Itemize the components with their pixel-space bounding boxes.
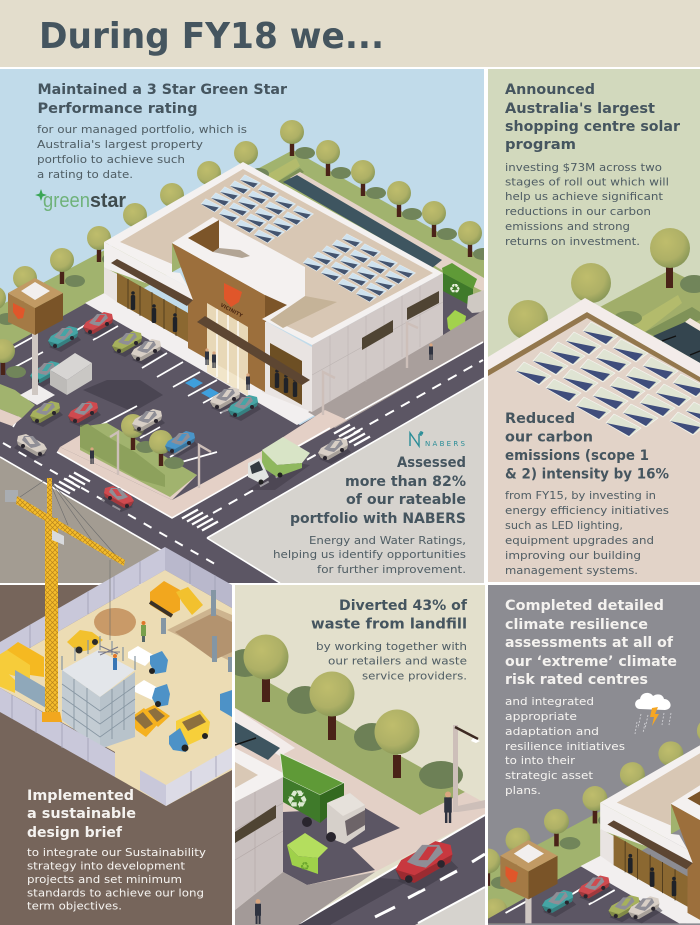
text: carbon emissions body: improving our building [505,549,641,562]
billboard pole [525,897,532,923]
heading: nabers: of our rateable [346,491,466,508]
yellow dump truck [169,710,210,752]
rear walkway and dark strip [653,318,700,363]
hill [482,707,700,923]
heading: climate resilience: climate resilience [505,616,648,633]
pavement [235,708,485,885]
service yard shadow [283,808,400,885]
store forecourt pavement [85,293,314,425]
storm cloud icon [635,693,671,734]
red car [396,841,458,890]
text: design brief body: projects and set minimum [27,873,182,886]
heading: design brief: a sustainable [27,805,136,822]
site cabins [0,642,53,712]
hedge band [489,866,602,923]
solar panels [516,322,700,437]
building: corner shop wall [262,319,312,412]
building: right wall [312,273,443,412]
building corner [235,748,283,910]
panel: climate resilience [475,585,700,925]
heading: nabers: portfolio with NABERS [290,510,466,527]
building: brown central block: VICINITY [219,302,244,319]
site floor [0,570,232,806]
text: waste diverted body: by working together with [316,640,467,653]
heading: nabers [290,454,466,527]
rear pavement and dark service strip [283,172,484,292]
verge trees [244,634,420,778]
trees [508,228,700,340]
isometric shopping centre scene [0,120,493,583]
panel: green star and nabers scene [0,69,493,583]
heading: design brief [27,787,136,841]
parking bay lines [506,882,615,913]
panel: waste diverted [227,585,485,925]
rubble pile [94,608,136,636]
text: solar program body: returns on investment. [505,235,640,248]
roof parapet [600,719,700,910]
text: climate resilience body: strategic asset [505,769,594,782]
text: green star body: Australia's largest property [37,138,204,151]
roof block top [671,777,700,892]
heading: carbon emissions: our carbon [505,428,593,446]
text: nabers body: for further improvement. [317,563,466,576]
text: waste diverted body [316,640,467,682]
building: roof surface [120,169,433,338]
planted island [57,410,347,518]
greenstar logo: green [43,190,90,212]
heading: climate resilience: Completed detailed [505,597,664,614]
text: climate resilience body: and integrated [505,695,594,708]
green recycling truck: ♻ [286,785,308,814]
heading: design brief: Implemented [27,787,134,804]
corner ground: grey triangle [207,378,484,583]
businessman [444,791,452,823]
text: carbon emissions body: from FY15, by investing in [505,489,656,502]
back fences [0,547,232,665]
woman [255,899,261,924]
construction ground [0,458,188,583]
greenstar logo: star [90,190,126,212]
accessible parking bays [185,378,219,398]
parked cars [542,875,663,923]
text: solar program body: stages of roll out which will [505,176,669,188]
building: brown block top and light well [172,217,337,328]
text: climate resilience body: appropriate [505,710,577,723]
excavator [150,581,203,616]
orange skips [130,705,170,737]
heading: green star [38,81,288,117]
bicycle shelter [50,353,92,395]
text: solar program body: emissions and strong [505,220,630,233]
text: design brief body: strategy into development [27,860,186,872]
heading: green star: Maintained a 3 Star Green Star [38,81,288,98]
road [298,815,485,925]
parked and moving cars [14,312,351,512]
building: roof parapet [104,162,443,345]
panel: solar and carbon [488,69,700,582]
heading: green star: Performance rating [38,100,198,117]
billboard sign [8,278,63,405]
forecourt [580,847,700,923]
text: design brief body: standards to achieve our long [27,886,204,900]
heading: solar program: program [505,136,576,153]
rooftop solar panels: array one [201,175,314,243]
text: solar program body [505,161,669,248]
text: nabers body [273,534,466,576]
text: solar program body: help us achieve significant [505,190,664,203]
heading: carbon emissions: Reduced [505,410,575,427]
heading: solar program: Announced [505,81,595,98]
text: carbon emissions body: equipment upgrades and [505,534,654,547]
text: waste diverted body: service providers. [362,670,467,682]
dark strip and walkway behind building [235,708,295,760]
heading: waste diverted [311,597,468,632]
blue and white trucks [128,646,232,717]
text: climate resilience body: to into their [505,754,576,767]
text: green star body: portfolio to achieve such [37,153,185,166]
text: climate resilience body [505,695,625,797]
heading: climate resilience: risk rated centres [505,671,648,688]
heading: carbon emissions [505,410,669,482]
text: green star body: a rating to date. [37,168,133,181]
brown central block [671,804,700,923]
text: nabers body: Energy and Water Ratings, [309,534,466,547]
text: nabers body: helping us identify opportunities [273,548,466,561]
verge tree shadows [227,649,463,789]
heading: waste diverted: waste from landfill [311,616,467,632]
heading: waste diverted: Diverted 43% of [339,597,468,614]
greenstar logo [35,189,126,212]
green verge [235,664,465,815]
side pavement [235,872,375,925]
text: green star body: for our managed portfolio, which is [37,123,247,136]
parking bay lines [13,318,233,463]
heading: solar program: shopping centre solar [505,118,681,135]
rooftop solar panels: array two [303,234,416,302]
text: solar program body: reductions in our carbon [505,205,651,218]
left edge green and pavement [0,339,35,426]
heading: nabers: Assessed [397,454,466,471]
heading: climate resilience: assessments at all of [505,634,674,651]
title: During FY18 we... [39,16,384,57]
heading: nabers: more than 82% [345,473,466,490]
shopping centre scene crop [475,698,700,923]
text: carbon emissions body: management systems. [505,564,638,577]
heading: solar program [505,81,681,153]
heading: design brief: design brief [27,824,123,841]
heading: climate resilience: our ‘extreme’ climate [505,653,677,670]
nabers logo: NABERS [425,440,466,448]
tower crane [5,478,125,722]
text: solar program body: investing $73M across two [505,161,662,174]
construction site illustration [0,478,232,806]
text: carbon emissions body: energy efficiency initiatives [505,504,669,517]
text: design brief body: to integrate our Sustainability [27,846,207,859]
roof surface [617,727,700,903]
text: green star body [37,123,247,181]
green recycling truck [280,753,365,844]
text: design brief body: term objectives. [27,900,122,912]
heading: climate resilience [505,597,677,688]
asphalt car park and roads [0,302,484,583]
text: waste diverted body: our retailers and waste [328,654,467,668]
green wheelie bin: ♻ [300,860,310,873]
nabers logo [410,431,466,448]
text: climate resilience body: resilience initiatives [505,740,625,753]
car park asphalt [482,865,686,923]
heading: carbon emissions: & 2) intensity by 16% [505,466,669,482]
text: climate resilience body: adaptation and [505,725,599,738]
text: carbon emissions body [505,489,669,577]
street lamps [110,323,418,488]
green wheelie bin [287,833,328,874]
roof parapet [488,298,700,377]
text: design brief body [27,846,207,912]
excavation pit [161,590,232,672]
roof surface [488,316,700,582]
front fences [0,688,232,806]
building: brown central block [172,243,310,396]
text: climate resilience body: plans. [505,784,541,797]
building: left shopfront [104,242,193,342]
roller and worker [67,621,146,654]
text: carbon emissions body: such as LED lighting, [505,519,623,532]
billboard head [500,840,558,899]
heading: carbon emissions: emissions (scope 1 [505,447,649,464]
panel: sustainable design brief background [0,585,232,925]
street lamp [453,725,485,812]
hill and hedge [600,270,700,340]
left shopfront [600,803,693,907]
concrete frame under construction [62,636,135,749]
hill with trees [0,120,484,344]
header band [0,0,700,67]
green recycling truck behind building: ♻ [449,282,461,297]
trees behind building [475,698,700,923]
green recycling truck behind building [440,263,484,345]
garbage truck [248,437,310,490]
people on forecourt [90,343,433,464]
side pavement [308,310,484,428]
heading: solar program: Australia's largest [505,100,655,117]
